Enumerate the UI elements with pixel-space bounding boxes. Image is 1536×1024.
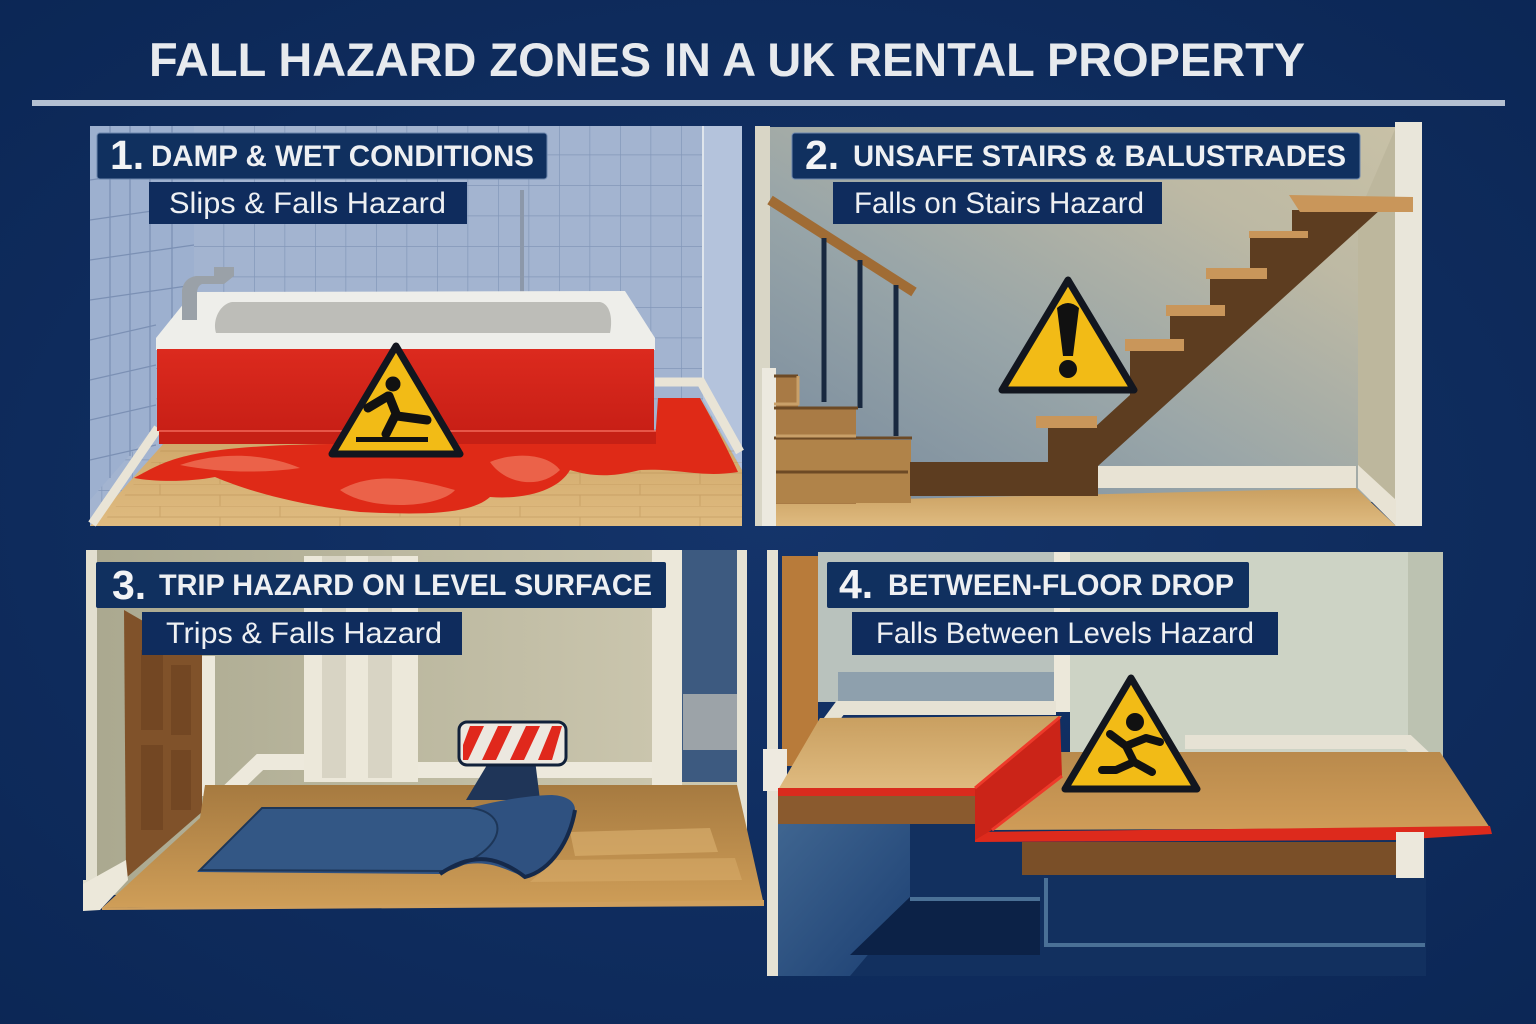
lower room — [778, 824, 1426, 976]
label 4 — [827, 561, 1278, 655]
floor — [90, 398, 742, 526]
label 2: 2. — [805, 132, 839, 178]
balustrade — [770, 200, 914, 436]
skirting boards — [92, 382, 740, 524]
upper wall left — [818, 552, 1058, 702]
label 2 — [792, 132, 1360, 224]
label 1: 1. — [110, 132, 144, 178]
back wall tiles — [90, 126, 742, 526]
tub basin — [215, 302, 611, 333]
wall — [86, 550, 746, 895]
red drop edge — [975, 717, 1062, 840]
lower floor — [994, 752, 1490, 830]
label 1 — [97, 132, 547, 224]
panel 4: between-floor drop — [763, 550, 1492, 976]
right wall — [1358, 127, 1396, 525]
door frame — [202, 656, 215, 796]
red tub panel — [157, 349, 654, 431]
back door — [304, 556, 418, 782]
label 4: Falls Between Levels Hazard — [876, 617, 1254, 650]
door — [124, 610, 202, 878]
left wall — [90, 126, 194, 500]
floor — [776, 488, 1396, 526]
warning sign: falling person — [1065, 678, 1197, 789]
panel 2: unsafe stairs and balustrades — [755, 122, 1422, 526]
lower stairs — [774, 376, 912, 504]
rug — [197, 795, 575, 877]
upper stair stringer — [910, 195, 1413, 496]
label 3: TRIP HAZARD ON LEVEL SURFACE — [159, 569, 652, 602]
label 3: Trips & Falls Hazard — [166, 617, 442, 650]
wall — [770, 127, 1398, 502]
left pillar — [755, 126, 770, 526]
skirting — [1098, 466, 1356, 488]
upper floor — [778, 716, 1062, 790]
barrier sign — [459, 722, 566, 800]
left skirting — [83, 860, 128, 911]
floor — [102, 785, 764, 908]
skirting — [215, 762, 652, 805]
right column and alcove — [652, 550, 682, 786]
left wall edge — [83, 550, 97, 910]
tub rim — [156, 291, 655, 350]
label 4: BETWEEN-FLOOR DROP — [888, 569, 1234, 602]
label 1: Slips & Falls Hazard — [169, 187, 446, 220]
red water — [134, 398, 738, 513]
left pillar — [767, 550, 778, 976]
label 4: 4. — [839, 561, 873, 607]
upper wall right — [1070, 552, 1410, 752]
label 1: DAMP & WET CONDITIONS — [151, 140, 534, 173]
warning sign: exclamation — [1002, 280, 1134, 390]
shower pipe — [520, 190, 524, 294]
label 2: UNSAFE STAIRS & BALUSTRADES — [853, 140, 1346, 173]
stair treads — [1036, 231, 1308, 428]
title: FALL HAZARD ZONES IN A UK RENTAL PROPERTY — [149, 33, 1305, 86]
right wall — [703, 126, 742, 470]
bathtub — [156, 267, 656, 444]
title rule — [32, 100, 1505, 106]
label 3 — [96, 562, 666, 655]
tap — [182, 267, 234, 320]
skirting — [820, 708, 1443, 775]
panel 1: damp and wet conditions — [90, 126, 742, 526]
panel 3: trip hazard on level surface — [83, 550, 764, 911]
label 2: Falls on Stairs Hazard — [854, 187, 1144, 220]
label 3: 3. — [112, 562, 146, 608]
warning sign: wet floor — [332, 346, 460, 454]
